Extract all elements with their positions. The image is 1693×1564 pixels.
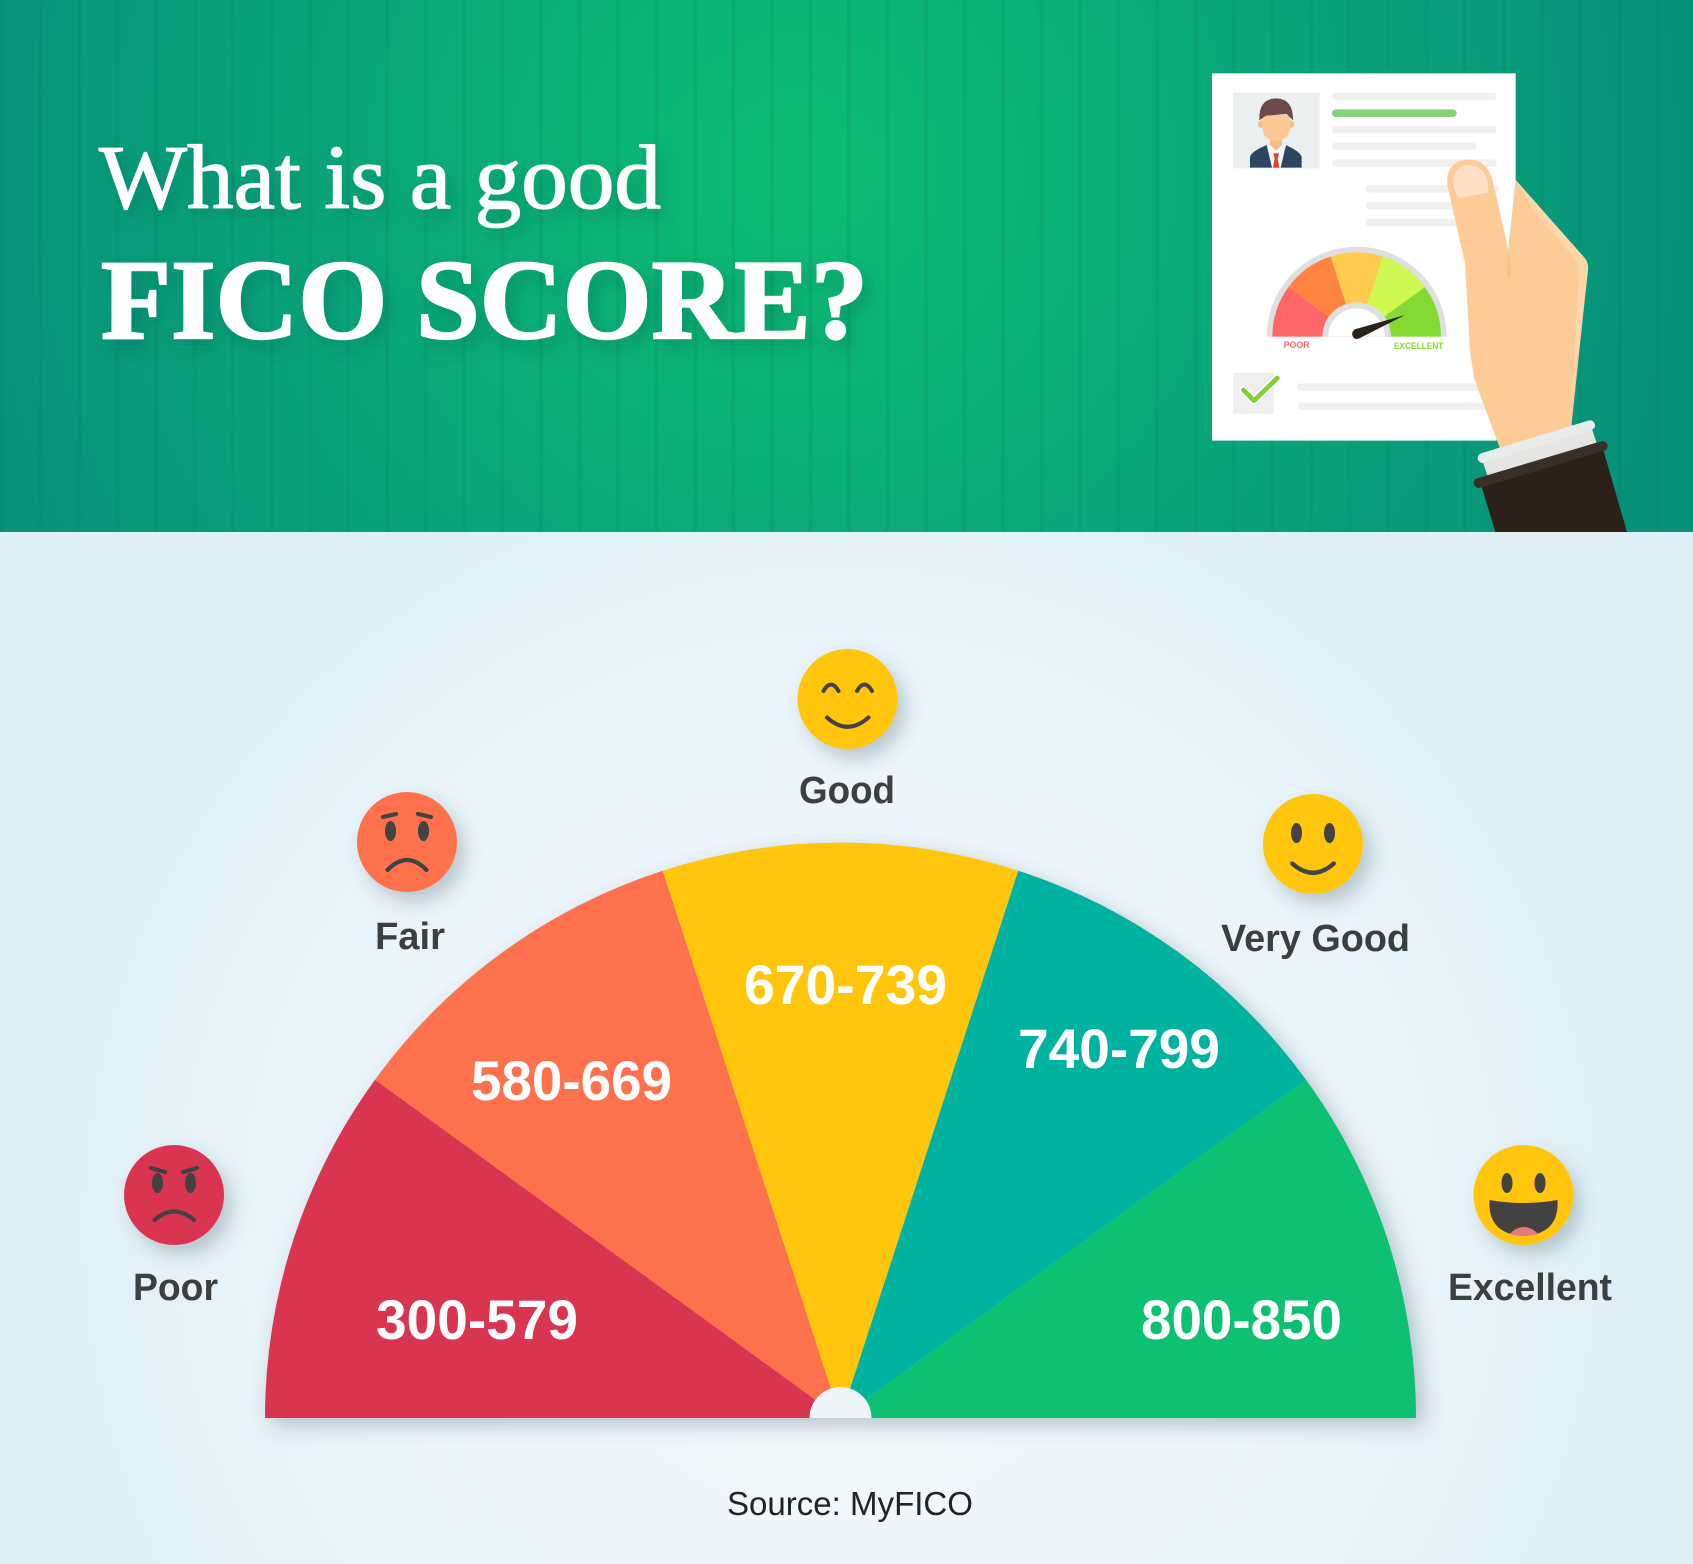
source note: Source: MyFICO	[727, 1485, 973, 1522]
label: Poor: Poor	[133, 1267, 218, 1309]
label: Fair: Fair	[375, 916, 445, 958]
score range 300-579: 300-579	[376, 1288, 578, 1351]
label: Very Good: Very Good	[1221, 918, 1410, 960]
score range 740-799: 740-799	[1018, 1017, 1220, 1080]
title: FICO SCORE?	[101, 238, 868, 363]
label: Excellent: Excellent	[1448, 1267, 1612, 1309]
lower panel background	[0, 532, 1693, 1564]
gauge needle	[1352, 315, 1405, 339]
icon: angry face (poor)	[124, 1145, 224, 1245]
checkbox with tick	[1233, 373, 1277, 414]
mini score gauge	[1267, 247, 1447, 351]
icon: laughing face (excellent)	[1474, 1145, 1574, 1245]
score gauge semicircle	[265, 843, 1416, 1418]
score range 580-669: 580-669	[471, 1049, 672, 1112]
icon: sad face (fair)	[357, 792, 457, 892]
green highlight line	[1332, 109, 1457, 117]
segment poor	[265, 1080, 840, 1418]
label: Good: Good	[799, 770, 895, 812]
profile photo	[1233, 93, 1320, 168]
hand	[1447, 159, 1588, 463]
icon: content face (good)	[798, 649, 898, 749]
score range 670-739: 670-739	[744, 953, 947, 1016]
gauge hub	[810, 1387, 872, 1418]
title: What is a good	[99, 127, 661, 228]
shirt cuff	[1482, 425, 1598, 478]
thumbnail	[1453, 165, 1488, 198]
title	[99, 127, 868, 363]
segment very good	[840, 871, 1306, 1418]
text placeholder lines	[1297, 93, 1499, 410]
gauge label poor: POOR	[1284, 340, 1310, 350]
suit sleeve	[1479, 446, 1627, 532]
score range 800-850: 800-850	[1141, 1288, 1342, 1351]
credit report paper	[1212, 73, 1516, 441]
segment fair	[375, 871, 840, 1418]
icon: smiling face (very good)	[1263, 794, 1363, 894]
gauge label excellent: EXCELLENT	[1394, 341, 1444, 351]
segment good	[663, 843, 1018, 1418]
segment excellent	[840, 1080, 1416, 1418]
illustration: hand holding credit report	[1212, 73, 1627, 532]
header background	[0, 0, 1693, 532]
